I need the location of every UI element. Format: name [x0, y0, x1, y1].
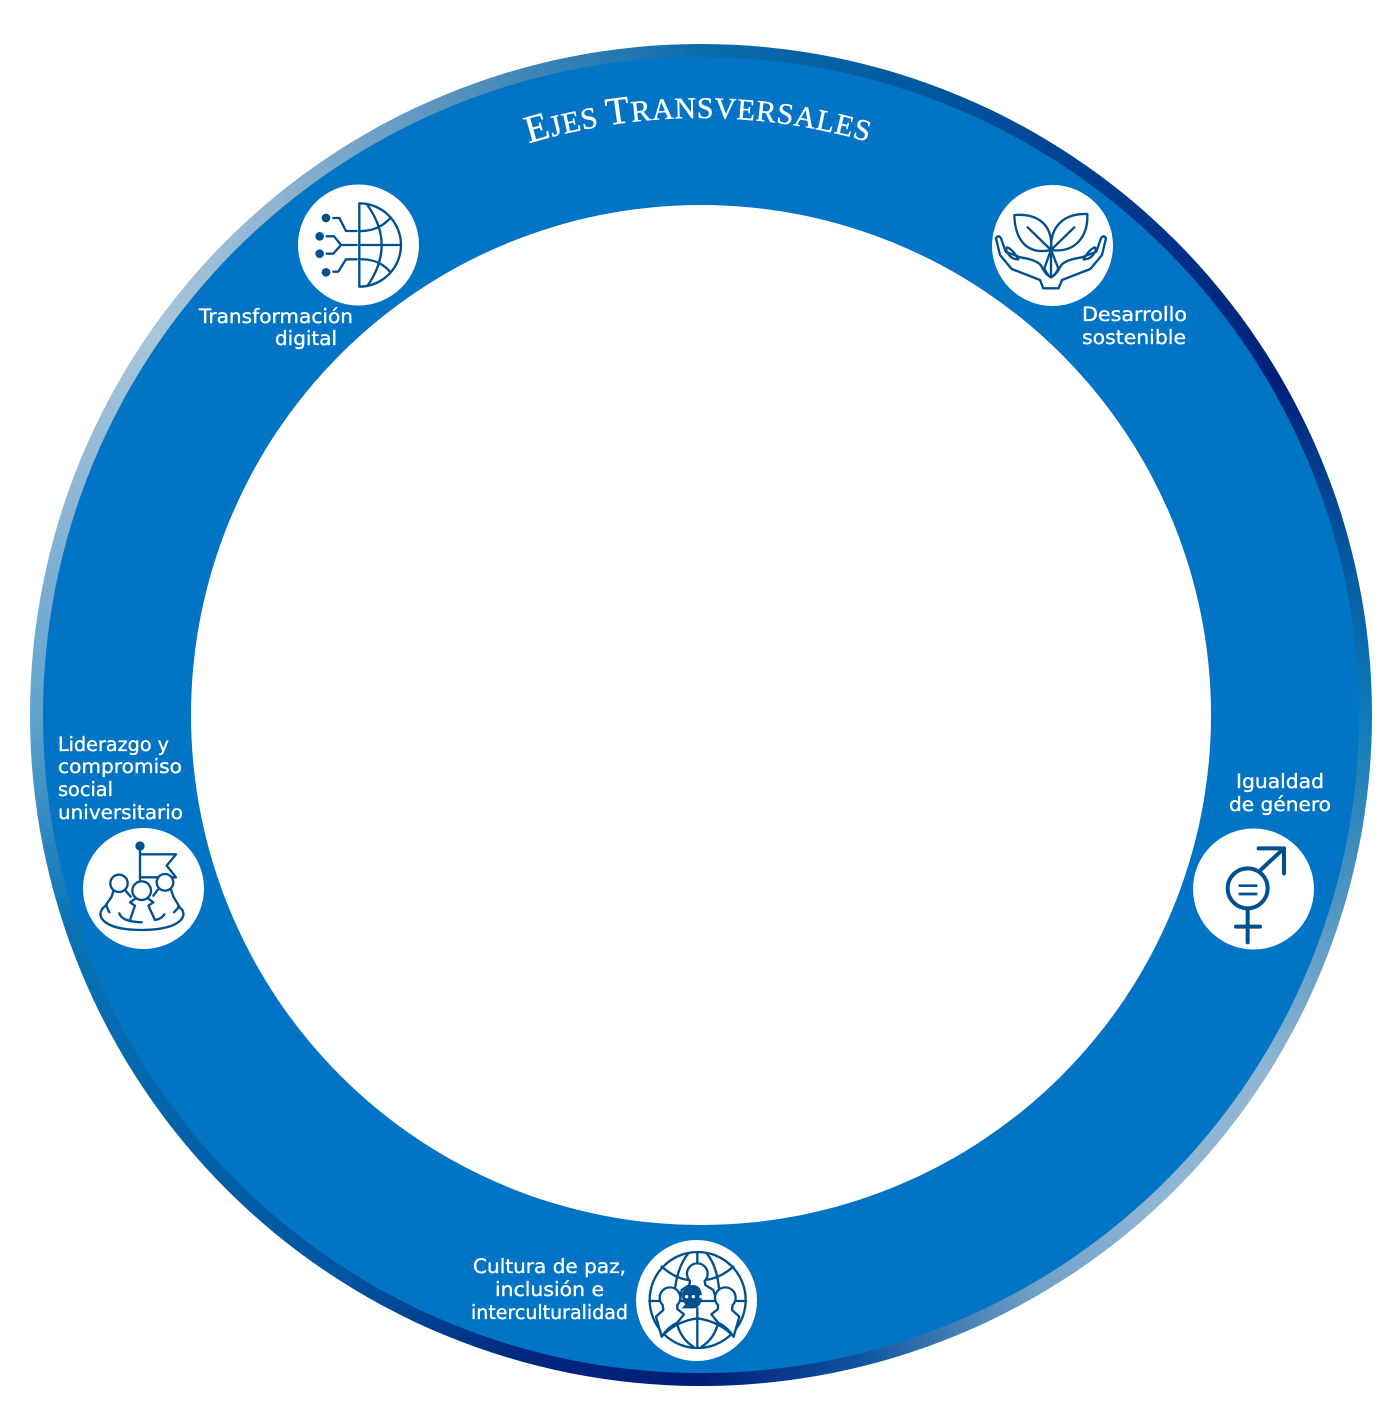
label: de género [1229, 793, 1331, 816]
label: universitario [58, 801, 183, 824]
icon: people on globe [649, 1252, 746, 1348]
icon: gender equality symbol [1228, 848, 1284, 942]
label: social [58, 778, 113, 801]
label: Igualdad [1236, 770, 1324, 793]
node: transformación digital [198, 184, 419, 350]
label: inclusión e [495, 1278, 604, 1301]
label: Desarrollo [1082, 303, 1187, 326]
label: compromiso [58, 755, 182, 778]
label: Transformación [198, 305, 353, 328]
label: Liderazgo y [58, 733, 169, 756]
label: sostenible [1082, 326, 1186, 349]
label: digital [275, 327, 337, 350]
node: desarrollo sostenible [992, 185, 1187, 349]
title: EJES TRANSVERSALES [522, 96, 870, 144]
node: liderazgo y compromiso [58, 733, 204, 949]
label: interculturalidad [471, 1301, 628, 1324]
icon: digital globe [315, 203, 401, 287]
node: igualdad de género [1193, 770, 1331, 950]
label: Cultura de paz, [473, 1255, 626, 1278]
icon: group with flag [100, 841, 183, 930]
icon: hands holding plant [996, 214, 1106, 288]
node: cultura de paz [471, 1240, 757, 1361]
